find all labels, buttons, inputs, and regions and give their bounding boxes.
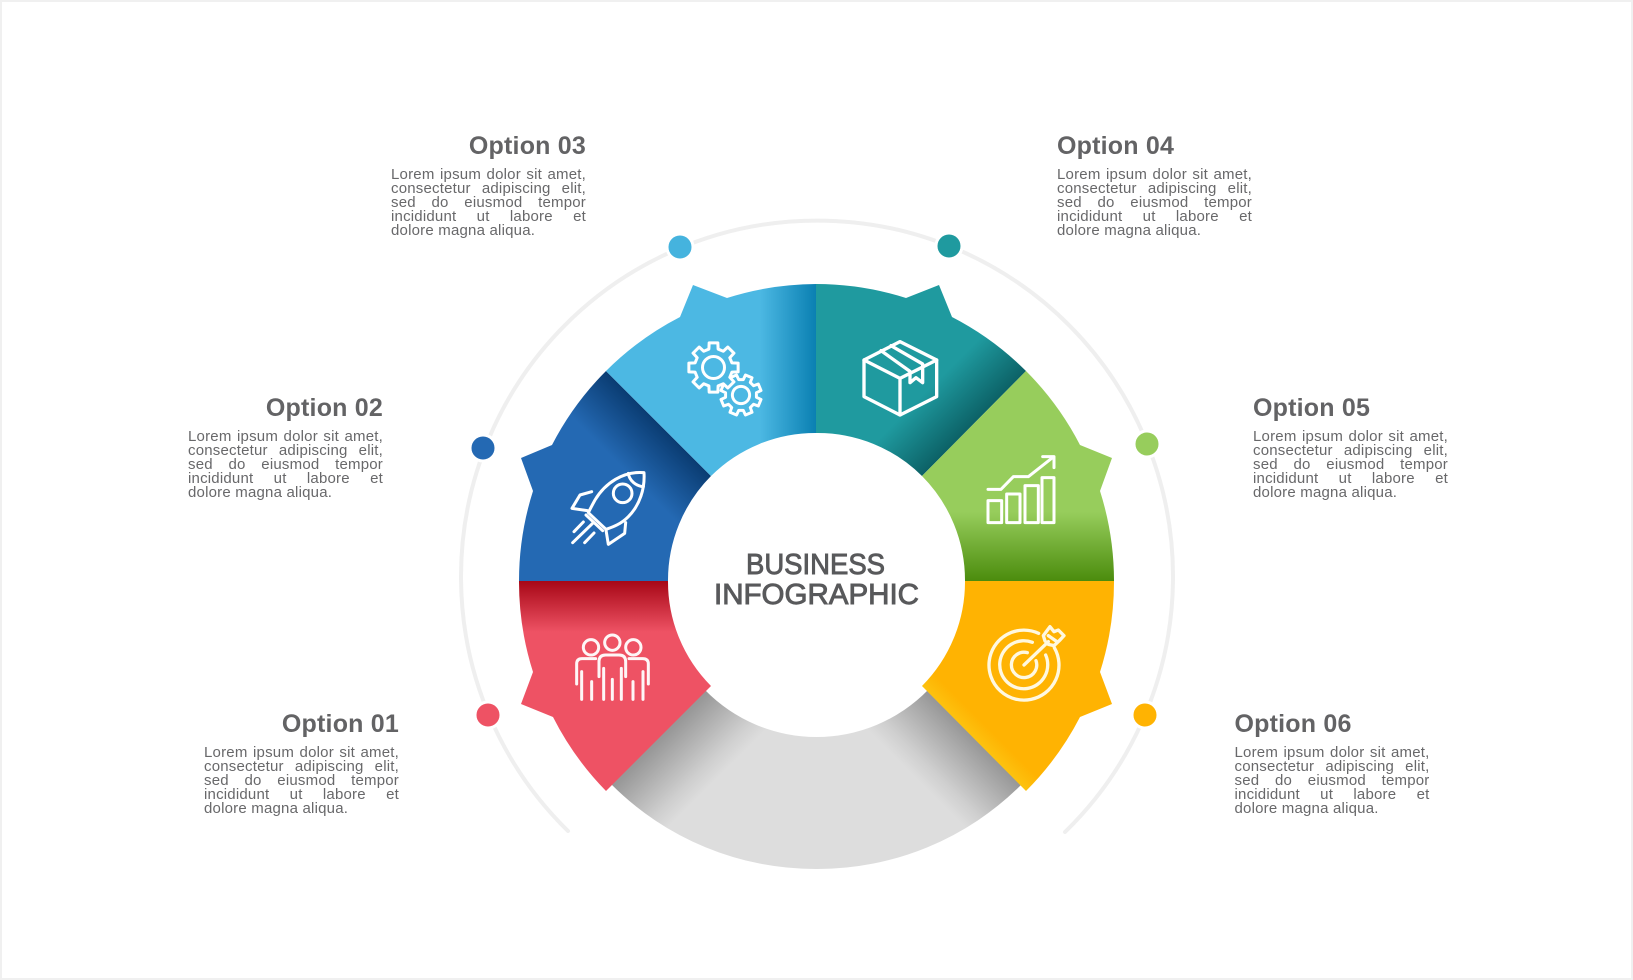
body text: option 04: incididunt ut labore et [1057, 208, 1252, 225]
body text: option 06: dolore magna aliqua. [1234, 800, 1379, 817]
body text: option 06: Lorem ipsum dolor sit amet, [1234, 744, 1430, 761]
icon: growth chart [988, 457, 1054, 523]
body text: option 04: consectetur adipiscing elit, [1057, 180, 1252, 197]
body text: option 05: sed do eiusmod tempor [1253, 456, 1448, 473]
text block: option 03 [391, 132, 586, 239]
center title: BUSINESS [746, 549, 885, 581]
body text: option 02: incididunt ut labore et [188, 470, 383, 487]
body text: option 06 [1234, 744, 1430, 817]
heading: option 06: Option 06 [1234, 710, 1352, 738]
body text: option 02: sed do eiusmod tempor [188, 456, 383, 473]
segment: option 03 light blue [606, 284, 816, 476]
body text: option 05: consectetur adipiscing elit, [1253, 442, 1448, 459]
body text: option 05: incididunt ut labore et [1253, 470, 1448, 487]
body text: option 01: consectetur adipiscing elit, [204, 758, 399, 775]
heading: option 03: Option 03 [469, 132, 586, 160]
body text: option 02 [188, 428, 383, 501]
segment: option 04 teal [816, 284, 1026, 476]
text block: option 04 [1057, 132, 1252, 239]
body text: option 02: dolore magna aliqua. [188, 484, 332, 501]
text block: option 05 [1253, 394, 1448, 501]
dot: option 06 [1132, 702, 1158, 728]
segment: option 06 yellow [922, 581, 1114, 791]
text block: option 01 [204, 710, 399, 817]
heading: option 04: Option 04 [1057, 132, 1174, 160]
text block: option 06 [1234, 710, 1430, 817]
body text: option 03: consectetur adipiscing elit, [391, 180, 586, 197]
grey bottom ring segment [611, 690, 1022, 869]
segment: option 02 blue [519, 371, 711, 581]
body text: option 01 [204, 744, 399, 817]
icon: team [577, 635, 648, 699]
heading: option 01: Option 01 [282, 710, 399, 738]
dot: option 01 [475, 702, 501, 728]
body text: option 03: Lorem ipsum dolor sit amet, [391, 166, 586, 183]
body text: option 03: sed do eiusmod tempor [391, 194, 586, 211]
body text: option 02: Lorem ipsum dolor sit amet, [188, 428, 383, 445]
body text: option 02: consectetur adipiscing elit, [188, 442, 383, 459]
body text: option 04: dolore magna aliqua. [1057, 222, 1201, 239]
body text: option 06: sed do eiusmod tempor [1234, 772, 1430, 789]
icon: target with arrow [989, 627, 1064, 700]
body text: option 06: consectetur adipiscing elit, [1234, 758, 1430, 775]
heading: option 02: Option 02 [266, 394, 383, 422]
body text: option 03: dolore magna aliqua. [391, 222, 535, 239]
body text: option 05 [1253, 428, 1448, 501]
icon: box [864, 342, 937, 415]
body text: option 01: incididunt ut labore et [204, 786, 399, 803]
body text: option 04: sed do eiusmod tempor [1057, 194, 1252, 211]
body text: option 01: Lorem ipsum dolor sit amet, [204, 744, 399, 761]
body text: option 01: dolore magna aliqua. [204, 800, 348, 817]
body text: option 05: Lorem ipsum dolor sit amet, [1253, 428, 1448, 445]
ring marker dots [470, 233, 1160, 728]
body text: option 06: incididunt ut labore et [1234, 786, 1430, 803]
text block: option 02 [188, 394, 383, 501]
dot: option 05 [1134, 431, 1160, 457]
heading: option 05: Option 05 [1253, 394, 1370, 422]
center title: INFOGRAPHIC [714, 579, 919, 611]
body text: option 03: incididunt ut labore et [391, 208, 586, 225]
dot: option 02 [470, 435, 496, 461]
icon: rocket [572, 472, 644, 544]
center title [714, 549, 919, 611]
body text: option 04: Lorem ipsum dolor sit amet, [1057, 166, 1252, 183]
outer thin ring [461, 221, 1173, 832]
dot: option 03 [667, 234, 693, 260]
dot: option 04 [936, 233, 962, 259]
body text: option 03 [391, 166, 586, 239]
body text: option 05: dolore magna aliqua. [1253, 484, 1397, 501]
icon: gears [689, 343, 767, 421]
body text: option 04 [1057, 166, 1252, 239]
segment: option 01 red [519, 581, 711, 791]
segment: option 05 green [922, 371, 1114, 581]
body text: option 01: sed do eiusmod tempor [204, 772, 399, 789]
